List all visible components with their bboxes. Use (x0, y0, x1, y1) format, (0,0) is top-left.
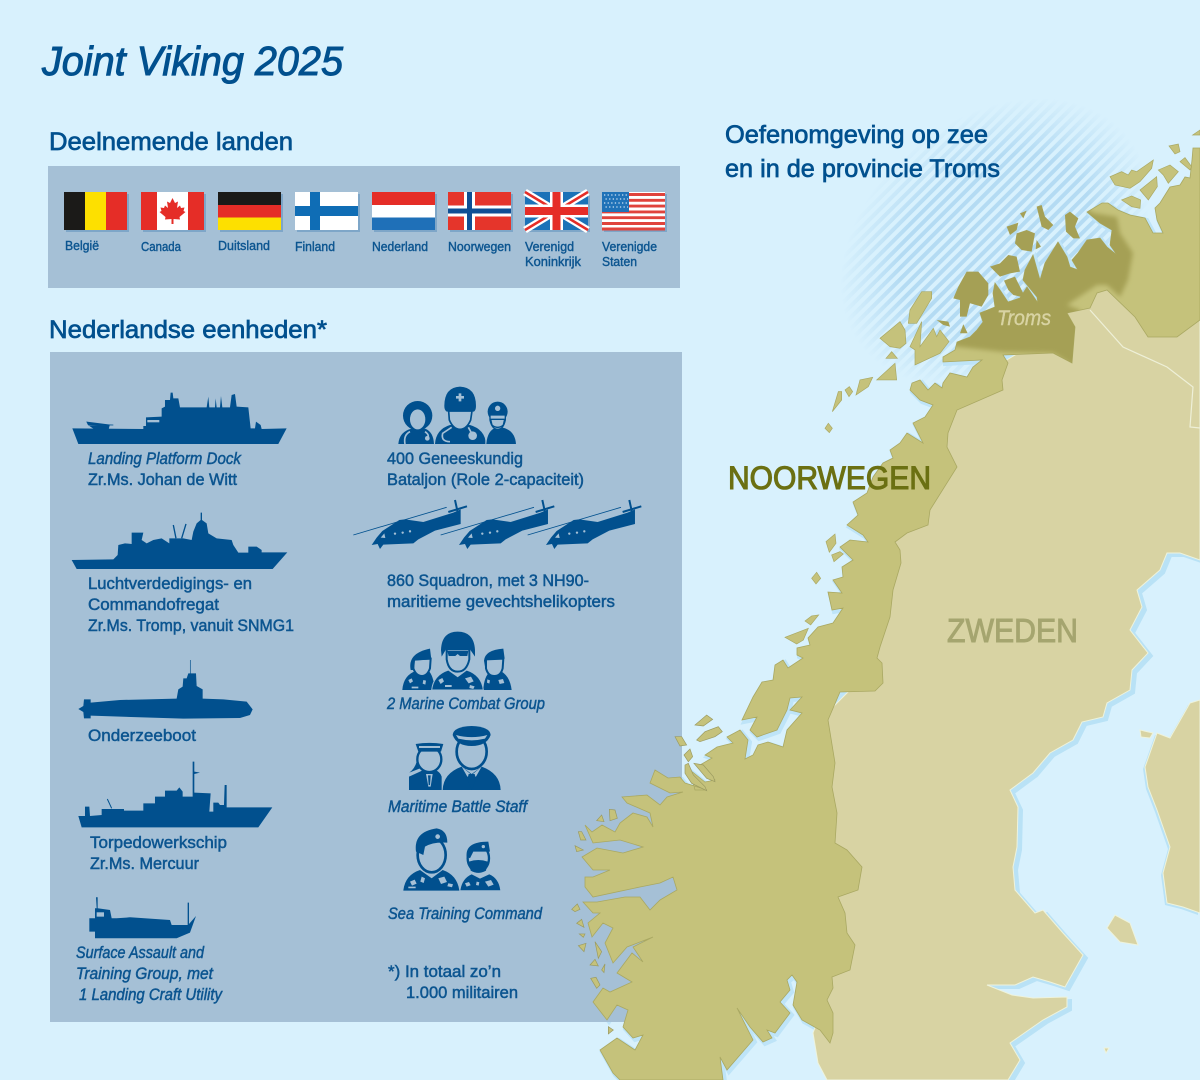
icon: naval officers (409, 726, 501, 790)
label: Bataljon (Role 2-capaciteit) (387, 470, 584, 489)
heading: Dutch units: Nederlandse eenheden* (49, 316, 327, 344)
label: Zr.Ms. Tromp, vanuit SNMG1 (88, 616, 294, 635)
flag labels: Koninkrijk (525, 254, 581, 269)
flag labels: Verenigd (525, 239, 574, 254)
map: coastal islands south Norway (572, 715, 722, 1034)
icon: instructors (403, 828, 501, 891)
unit: 860 Squadron (353, 500, 641, 611)
flag labels: Staten (602, 254, 637, 269)
map: northern islands (1110, 130, 1200, 208)
label: Norway: NOORWEGEN (728, 460, 931, 496)
label: 400 Geneeskundig (387, 449, 523, 468)
flag: Netherlands (372, 192, 437, 232)
unit: Landing Platform Dock (72, 393, 287, 489)
flag labels: Nederland (372, 239, 428, 254)
heading: exercise area (725, 121, 1000, 183)
label (90, 833, 227, 873)
map: Norway (572, 130, 1200, 1080)
label (88, 574, 294, 635)
icon: three NH90 helicopters (353, 500, 641, 549)
label: Onderzeeboot (88, 726, 196, 745)
unit: Sea Training Command (388, 828, 542, 923)
label: Zr.Ms. Johan de Witt (88, 470, 237, 489)
icon: landing craft (89, 897, 196, 938)
map: Troms province (956, 210, 1134, 362)
unit: medical battalion (387, 387, 584, 489)
flag: Germany (218, 192, 283, 232)
label: Surface Assault and (76, 943, 204, 962)
unit: surface assault group (76, 897, 223, 1004)
label: Torpedowerkschip (90, 833, 227, 852)
label (88, 449, 242, 489)
map: Lofoten and Vesteralen islands (825, 292, 949, 433)
title: Joint Viking 2025 (41, 38, 343, 84)
icon: air defence frigate (72, 513, 287, 569)
heading: participating countries: Deelnemende landen (49, 128, 293, 156)
label: 2 Marine Combat Group (386, 694, 545, 713)
flag labels: Finland (295, 239, 335, 254)
label: Troms: Troms (997, 307, 1051, 330)
label: 860 Squadron, met 3 NH90- (387, 571, 589, 590)
unit: Maritime Battle Staff (388, 726, 529, 816)
icon: submarine (78, 660, 253, 719)
label (76, 943, 223, 1004)
panel: Dutch units background (50, 352, 682, 1022)
heading: exercise area: en in de provincie Troms (725, 155, 1000, 183)
flag labels (65, 238, 657, 269)
icon: landing platform dock ship (72, 393, 287, 444)
flag labels: Verenigde (602, 239, 657, 254)
flag labels: België (65, 238, 99, 253)
unit: frigate (72, 513, 294, 635)
coastal shallows (584, 150, 1200, 1080)
map: Troms islands (937, 205, 1080, 333)
label: Maritime Battle Staff (388, 797, 529, 816)
label: 1 Landing Craft Utility (79, 985, 223, 1004)
panel: participating countries (48, 166, 680, 288)
label (387, 449, 584, 489)
label: Landing Platform Dock (88, 449, 242, 468)
label: Zr.Ms. Mercuur (90, 854, 199, 873)
flag: Canada (141, 192, 206, 232)
unit: submarine (78, 660, 253, 745)
label (387, 571, 615, 611)
label: Sweden: ZWEDEN (947, 612, 1078, 649)
label: Sea Training Command (388, 904, 542, 923)
footnote (388, 962, 518, 1002)
footnote: *) In totaal zo’n (388, 962, 501, 981)
flag: United Kingdom (525, 192, 590, 232)
heading: exercise area: Oefenomgeving op zee (725, 121, 988, 149)
label: Commandofregat (88, 595, 219, 614)
label: maritieme gevechtshelikopters (387, 592, 615, 611)
flag labels: Duitsland (218, 238, 270, 253)
hatched exercise area at sea (854, 110, 1136, 374)
footnote: 1.000 militairen (406, 983, 518, 1002)
icon: torpedo workship (78, 762, 272, 827)
flag: United States (602, 192, 667, 232)
icon: marines (402, 632, 512, 690)
map: Sweden and Finland (813, 285, 1200, 1080)
flag: Belgium (64, 192, 129, 232)
flag labels: Noorwegen (448, 239, 511, 254)
map: coastal islands mid Norway (785, 534, 843, 644)
label: Luchtverdedigings- en (88, 574, 252, 593)
flag: Finland (295, 192, 360, 232)
label: Training Group, met (76, 964, 214, 983)
unit: torpedo workship (78, 762, 272, 873)
map: border Sweden Finland (1090, 310, 1200, 428)
flag: Norway (448, 192, 513, 232)
flag labels: Canada (141, 239, 182, 254)
unit: Marine Combat Group (386, 632, 545, 713)
icon: medical personnel (398, 387, 516, 444)
